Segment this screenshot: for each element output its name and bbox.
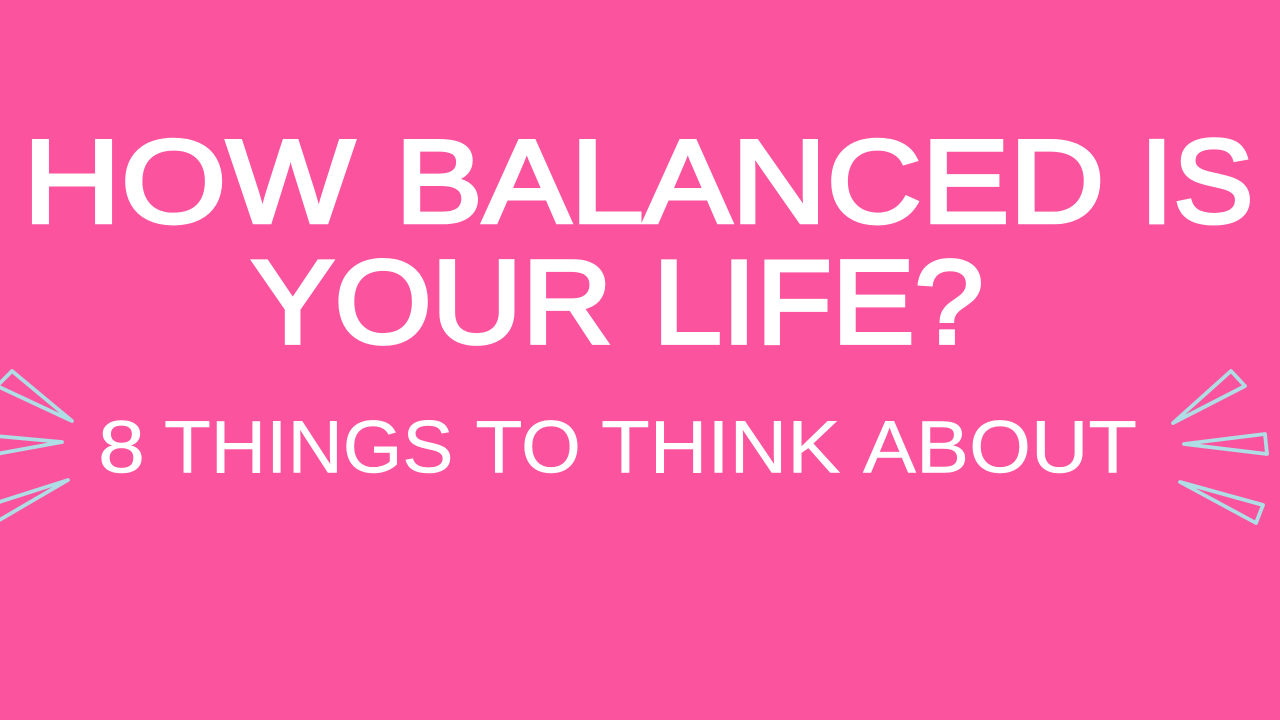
- title: BALANCED: [395, 116, 1104, 248]
- subtitle: [98, 406, 1137, 489]
- subtitle: TO: [475, 406, 581, 489]
- subtitle: ABOUT: [863, 406, 1137, 489]
- subtitle: 8: [98, 406, 145, 489]
- subtitle: THINK: [601, 406, 840, 489]
- title: LIFE?: [653, 237, 984, 369]
- title: [23, 116, 1254, 369]
- title: YOUR: [251, 237, 612, 369]
- icon: right burst lines: [1173, 371, 1267, 523]
- title: HOW: [23, 116, 355, 248]
- icon: left burst lines: [0, 371, 72, 522]
- subtitle: THINGS: [164, 406, 454, 489]
- title: IS: [1140, 116, 1254, 248]
